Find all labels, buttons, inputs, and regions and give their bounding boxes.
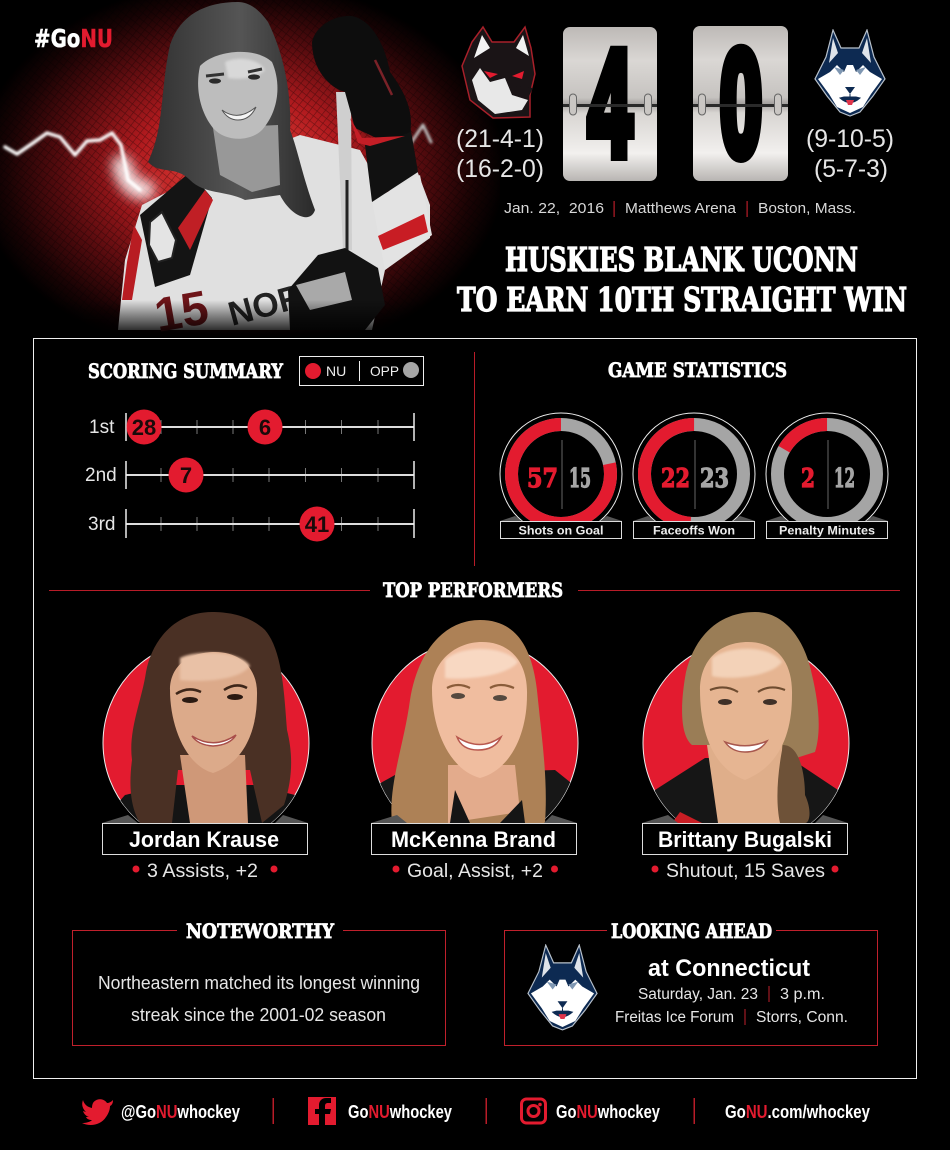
game details: Saturday, Jan. 23 [638,986,758,1003]
game details [615,986,848,1026]
flip card: 4: 4 [588,19,632,187]
game info line: Boston, Mass. [758,200,856,217]
heading: GAME STATISTICS [608,358,787,382]
record: UConn: (5-7-3) [814,155,888,183]
heading: NOTEWORTHY [186,919,335,943]
hashtag: #GoNU [34,24,113,53]
instagram handle: GoNUwhockey [556,1101,661,1122]
footer: social links [82,1097,871,1125]
game info line [504,200,856,217]
flip card: 0: 0 [720,19,762,187]
body text: Northeastern matched its longest winning [98,972,420,993]
timeline: 1st period: 1st [89,417,115,438]
website: GoNU.com/whockey [725,1101,871,1122]
gauge: shots on goal [500,413,622,538]
panel: scoring summary [85,356,424,542]
record: Northeastern [456,125,544,183]
bottom fade [0,300,500,338]
timeline: 2nd period: 7 [180,463,192,488]
gauge: faceoffs won: 23 [700,464,729,494]
twitter handle: @GoNUwhockey [121,1101,241,1122]
lightning trace [5,125,431,190]
logo: UConn husky [815,30,885,116]
sleeve with red stripe [372,175,432,270]
neck [213,125,280,192]
heading: top performers: TOP PERFORMERS [383,578,563,602]
record: UConn: (9-10-5) [806,125,894,153]
record: UConn [806,125,894,183]
stat line: 3 Assists, +2 [147,860,258,882]
opponent: at Connecticut [648,955,810,982]
stat line: Shutout, 15 Saves [666,860,825,882]
logo: UConn husky [528,945,597,1030]
record: Northeastern: (21-4-1) [456,125,544,153]
jersey number and lettering: 15 [151,281,212,343]
game info line: Jan. 22, 2016 [504,200,604,217]
logo: Northeastern husky [462,27,535,118]
player: NOR [224,277,307,334]
timeline: 2nd period [85,458,414,492]
crest [149,212,176,262]
game details: Freitas Ice Forum [615,1009,734,1026]
gauge: faceoffs won [633,413,755,538]
headline [457,240,907,319]
heading: LOOKING AHEAD [611,919,772,943]
icon: twitter [82,1099,113,1125]
legend [300,356,424,386]
player [118,2,432,343]
name plate [642,815,848,854]
game details: Storrs, Conn. [756,1009,848,1026]
timeline: 3rd period: 3rd [88,514,115,535]
lower glove [288,248,385,330]
portrait [102,612,310,823]
upper glove [312,16,411,142]
scoreboard [456,19,894,187]
portrait [372,620,578,823]
name plate: Jordan Krause [129,827,279,852]
stat line: Goal, Assist, +2 [407,860,543,882]
gauge: penalty minutes: 2 [801,464,815,494]
game info line: Matthews Arena [625,200,737,217]
heading: SCORING SUMMARY [88,359,284,383]
gauge: shots on goal: 15 [569,464,591,494]
flip card: 0 [693,19,788,187]
face [198,52,277,139]
flip card: 4 [563,19,657,187]
dark shoulder yoke with red stripe [140,172,212,287]
legend: OPP [370,363,399,379]
timeline: 1st period [89,410,414,444]
gauge: penalty minutes: Penalty Minutes [779,524,875,538]
icon: instagram [522,1099,546,1123]
timeline: 1st period: 28 [132,415,156,440]
game details: 3 p.m. [780,986,825,1003]
name plate [102,815,308,854]
hockey stick [336,92,352,250]
panel: noteworthy [72,919,446,1046]
panel: game statistics [500,358,895,542]
gauge: shots on goal: Shots on Goal [518,524,604,538]
gauge: faceoffs won: 22 [661,464,690,494]
facebook handle: GoNUwhockey [348,1101,453,1122]
timeline: 1st period: 6 [259,415,271,440]
performer: Brittany Bugalski [640,612,850,882]
performer: Jordan Krause [100,612,310,882]
name plate: McKenna Brand [391,827,556,852]
hair [148,2,315,217]
gauge: shots on goal: 57 [527,464,558,494]
gauge: penalty minutes: 12 [834,464,855,494]
gauge: faceoffs won: Faceoffs Won [653,524,735,538]
icon: facebook [308,1097,336,1125]
main panel [34,338,916,1078]
body text [98,972,420,1025]
timeline: 2nd period: 2nd [85,465,117,486]
performer: McKenna Brand [368,620,580,882]
legend: NU [326,363,346,379]
hero: player photo on red glow [0,0,500,343]
name plate: Brittany Bugalski [658,827,832,852]
timeline: 3rd period: 41 [305,512,329,537]
portrait [642,612,850,823]
record: Northeastern: (16-2-0) [456,155,544,183]
body text: streak since the 2001-02 season [131,1004,386,1025]
panel: looking ahead [504,919,878,1046]
background glow [0,0,500,340]
gauge: penalty minutes [759,406,895,542]
name plate [371,815,577,854]
timeline: 3rd period [88,506,414,542]
jersey [118,135,430,330]
